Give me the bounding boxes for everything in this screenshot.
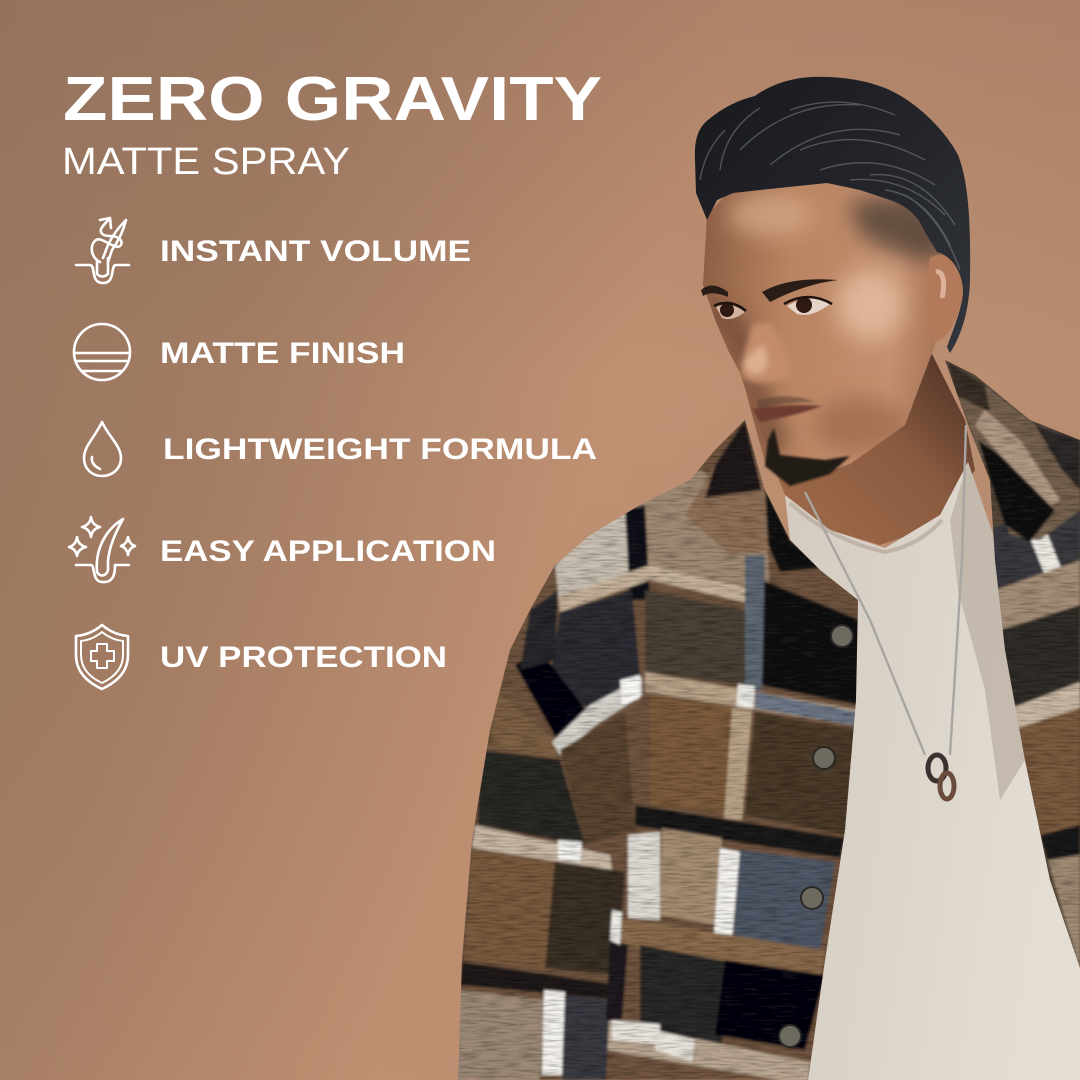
icon: layered circle bbox=[74, 324, 130, 380]
jacket left side bbox=[440, 400, 870, 1080]
title: ZERO GRAVITY bbox=[63, 65, 602, 134]
label: MATTE FINISH bbox=[160, 337, 405, 370]
head and face bbox=[701, 184, 945, 488]
hair bbox=[695, 77, 970, 353]
icon: water drop bbox=[84, 422, 121, 476]
label: INSTANT VOLUME bbox=[160, 235, 471, 268]
feature: lightweight formula bbox=[84, 422, 597, 476]
jacket right side bbox=[940, 350, 1080, 980]
label: LIGHTWEIGHT FORMULA bbox=[163, 433, 597, 466]
mouth bbox=[752, 396, 822, 422]
forehead highlight bbox=[728, 193, 812, 237]
feature: matte finish bbox=[74, 324, 405, 380]
sleeve blocks bbox=[550, 590, 640, 710]
subtitle: MATTE SPRAY bbox=[62, 141, 350, 183]
hair strands bbox=[700, 102, 960, 270]
goatee bbox=[765, 428, 850, 486]
t-shirt shadow bbox=[950, 462, 1025, 800]
body upper blocks bbox=[645, 590, 745, 685]
eyes bbox=[714, 297, 832, 319]
t-shirt collar line bbox=[790, 503, 942, 552]
photo: man in plaid shirt jacket bbox=[440, 77, 1080, 1080]
label: EASY APPLICATION bbox=[160, 535, 496, 568]
feature: instant volume bbox=[76, 218, 471, 283]
shaded left cheek bbox=[700, 300, 790, 470]
left collar bbox=[685, 420, 776, 555]
neck bbox=[775, 340, 975, 545]
body middle blocks bbox=[650, 696, 731, 813]
temple fade bbox=[850, 195, 955, 262]
icon: shining hair bbox=[69, 517, 135, 582]
white t-shirt bbox=[785, 462, 1080, 1080]
shoulder bbox=[555, 505, 640, 610]
feature: uv protection bbox=[76, 625, 447, 689]
cheek highlight bbox=[836, 269, 904, 341]
icon: hair volume bbox=[76, 218, 129, 283]
ear bbox=[927, 255, 963, 342]
ear highlight bbox=[936, 272, 944, 298]
eyebrows bbox=[701, 279, 838, 302]
pendant bbox=[928, 755, 954, 799]
label: UV PROTECTION bbox=[160, 641, 447, 674]
jacket buttons bbox=[779, 625, 853, 1047]
right collar bbox=[945, 360, 1080, 540]
feature: easy application bbox=[69, 517, 496, 582]
icon: shield with cross bbox=[76, 625, 128, 689]
body lower blocks bbox=[660, 828, 722, 925]
nose bbox=[741, 322, 790, 383]
lower cheek shade bbox=[815, 397, 905, 453]
necklace bbox=[805, 425, 966, 755]
